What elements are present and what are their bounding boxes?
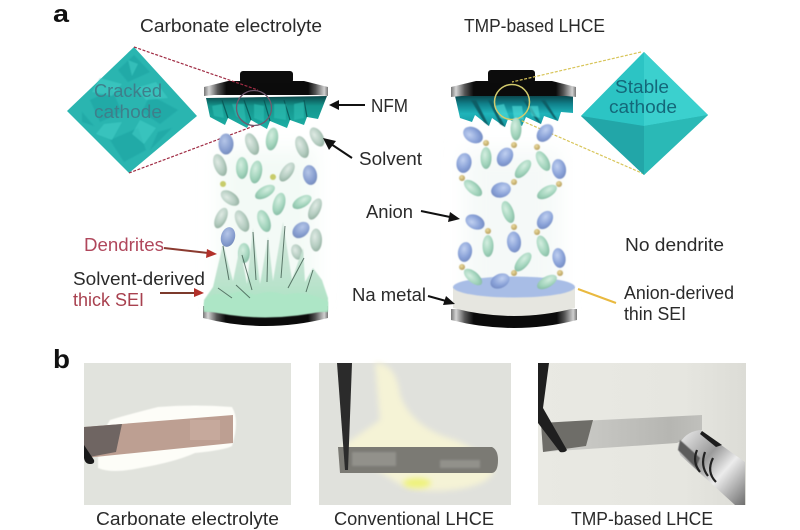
callout: solvent (323, 138, 422, 169)
callout: solvent-derived thick SEI: thick SEI (73, 290, 144, 310)
callout: NFM (329, 96, 408, 116)
yellow magnifier circle (494, 84, 530, 120)
right cell top: cap and cathode (451, 70, 576, 127)
yellow zoom lines (512, 52, 644, 174)
red zoom lines (129, 47, 258, 173)
callout: Na metal: Na metal (352, 285, 426, 305)
callout: anion-derived thin SEI (578, 283, 734, 324)
label: cracked cathode (94, 81, 162, 122)
callout: anion-derived thin SEI: thin SEI (624, 304, 686, 324)
caption: TMP-based LHCE: TMP-based LHCE (571, 509, 713, 529)
dendrites and thick SEI (204, 222, 328, 318)
heading: TMP-based LHCE: TMP-based LHCE (464, 15, 605, 36)
label: stable cathode (609, 77, 677, 117)
callout: solvent-derived thick SEI (73, 269, 205, 310)
photo: carbonate electrolyte (84, 363, 291, 505)
panel b (53, 344, 746, 529)
label: no dendrite: No dendrite (625, 235, 724, 255)
Na metal block (453, 287, 575, 316)
photo: conventional LHCE (319, 363, 511, 505)
panel a (53, 1, 734, 328)
panel label a: a (53, 1, 70, 28)
callout: anion (366, 202, 460, 222)
callout: NFM: NFM (371, 96, 408, 116)
soft halo behind cells (220, 150, 560, 300)
red magnifier circle (236, 90, 272, 126)
callout: solvent: Solvent (359, 149, 422, 169)
callout: anion-derived thin SEI: Anion-derived (624, 283, 734, 303)
photo: TMP-based LHCE (538, 363, 746, 505)
panel label b: b (53, 344, 70, 374)
right base disc (451, 309, 577, 328)
callout: solvent-derived thick SEI: Solvent-derived (73, 269, 205, 289)
caption: conventional LHCE: Conventional LHCE (334, 509, 494, 529)
label: stable cathode: cathode (609, 97, 677, 117)
callout: dendrites (84, 235, 217, 258)
right particles: anion solvation chains (455, 118, 568, 292)
callout: dendrites: Dendrites (84, 235, 164, 255)
left particles: solvent and anion (210, 125, 327, 263)
caption: carbonate electrolyte: Carbonate electrolyte (96, 509, 279, 529)
stable cathode octahedron (581, 52, 708, 175)
label: stable cathode: Stable (615, 77, 669, 97)
callout: Na metal (352, 285, 455, 305)
blue thin SEI (453, 276, 575, 298)
cracked cathode diamond (67, 47, 197, 173)
left base disc (203, 306, 328, 326)
left cell top: cap and NFM cathode (204, 71, 328, 129)
heading: carbonate electrolyte: Carbonate electrolyte (140, 15, 322, 36)
callout: anion: Anion (366, 202, 413, 222)
label: cracked cathode: cathode (94, 102, 162, 122)
label: cracked cathode: Cracked (94, 81, 162, 101)
